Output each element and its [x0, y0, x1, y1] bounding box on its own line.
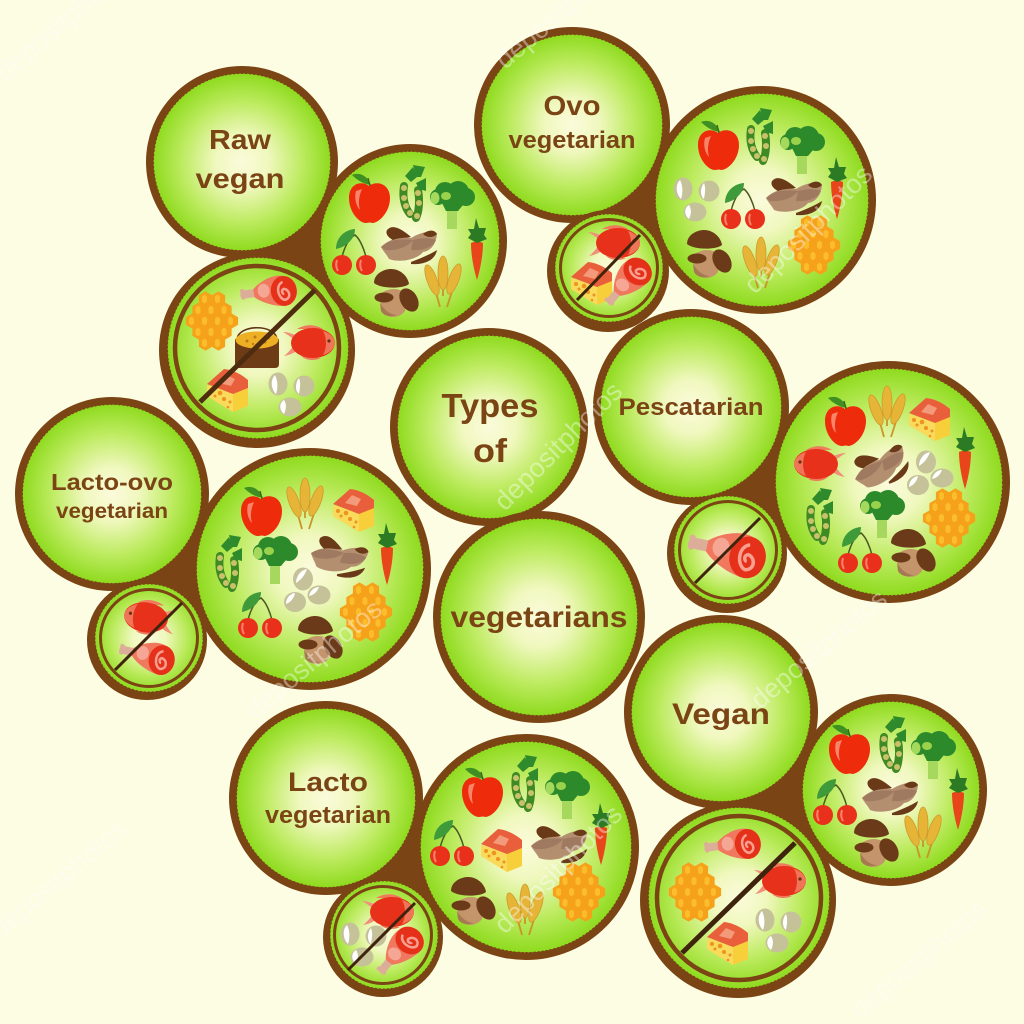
icon: cherry: [813, 779, 857, 825]
watermarks: depositphotos: [845, 894, 993, 1024]
icon: wheat: [504, 884, 546, 935]
watermarks: depositphotos: [240, 594, 388, 725]
icon: nuts: [531, 826, 587, 863]
icon: broccoli: [253, 536, 298, 584]
watermarks: depositphotos: [488, 376, 628, 516]
heading: types of: Types: [442, 387, 538, 424]
watermarks: depositphotos: [745, 584, 893, 715]
heading: vegetarians: vegetarians: [450, 601, 628, 634]
icon: nuts: [766, 178, 822, 215]
icon: fish: [283, 325, 335, 360]
icon: eggs: [268, 372, 314, 416]
icon: fish: [754, 863, 806, 898]
icon: pot: [235, 328, 279, 368]
heading: lacto-ovo vegetarian: [51, 469, 173, 523]
heading: lacto-ovo vegetarian: vegetarian: [56, 500, 168, 523]
icon: broccoli: [430, 181, 475, 229]
watermarks: depositphotos: [488, 799, 628, 939]
icon: carrot: [956, 427, 975, 489]
icon: wheat: [866, 386, 908, 437]
icon: broccoli: [545, 771, 590, 819]
panel: types of: [390, 328, 588, 526]
icon: meat: [702, 826, 763, 865]
icon: carrot: [592, 803, 611, 865]
icon: cheese: [481, 829, 522, 872]
prohibition line: [348, 903, 415, 970]
icon: honeycomb: [553, 862, 605, 922]
icon: apple: [825, 397, 866, 446]
icon: carrot: [949, 768, 968, 830]
icon: carrot: [468, 218, 487, 280]
icon: honeycomb: [923, 488, 975, 548]
panel: vegan: [624, 615, 987, 998]
panel: raw vegan: [146, 66, 507, 448]
icon: apple: [462, 768, 503, 817]
icon: meat: [369, 920, 429, 984]
panel: lacto vegetarian: [229, 701, 639, 997]
icon: eggs: [907, 450, 954, 495]
icon: mushroom: [298, 616, 347, 664]
panel: vegetarians: [433, 511, 645, 723]
icon: apple: [698, 121, 739, 170]
icon: cherry: [721, 183, 765, 229]
icon: nuts: [848, 440, 914, 495]
prohibition line: [682, 843, 795, 953]
icon: meat: [238, 273, 299, 312]
icon: nuts: [862, 778, 918, 815]
icon: carrot: [828, 157, 847, 219]
icon: peas: [217, 535, 242, 589]
heading: vegan: Vegan: [672, 698, 770, 731]
icon: wheat: [284, 478, 326, 529]
heading: raw vegan: vegan: [196, 163, 284, 194]
heading: types of: of: [473, 432, 508, 469]
heading: types of: [442, 387, 538, 469]
icon: cheese: [207, 369, 248, 412]
icon: meat: [597, 251, 657, 315]
icon: nuts: [381, 227, 437, 264]
icon: eggs: [756, 908, 802, 952]
prohibition line: [577, 235, 640, 300]
icon: mushroom: [891, 529, 940, 577]
icon: honeycomb: [186, 291, 238, 351]
icon: wheat: [740, 237, 782, 288]
heading: ovo vegetarian: [508, 90, 636, 154]
icon: wheat: [902, 807, 944, 858]
icon: fish: [794, 446, 846, 481]
prohibition line: [115, 603, 182, 670]
icon: peas: [401, 165, 426, 219]
panel: ovo vegetarian: [474, 27, 876, 332]
icon: meat: [683, 523, 770, 582]
panel: lacto-ovo vegetarian: [15, 397, 431, 700]
heading: raw vegan: Raw: [209, 124, 271, 155]
heading: lacto-ovo vegetarian: Lacto-ovo: [51, 469, 173, 495]
heading: ovo vegetarian: vegetarian: [508, 127, 636, 154]
icon: cheese: [707, 922, 748, 965]
icon: cheese: [909, 398, 950, 441]
icon: honeycomb: [340, 582, 392, 642]
icon: carrot: [378, 523, 397, 585]
icon: honeycomb: [669, 862, 721, 922]
icon: peas: [513, 755, 538, 809]
heading: pescatarian: Pescatarian: [618, 394, 764, 421]
heading: lacto vegetarian: vegetarian: [265, 802, 391, 829]
icon: cheese: [333, 489, 374, 532]
icon: wheat: [422, 256, 464, 307]
icon: broccoli: [860, 490, 905, 538]
heading: lacto vegetarian: [265, 767, 391, 829]
icon: cheese: [571, 262, 612, 305]
icon: mushroom: [854, 819, 903, 867]
prohibition line: [695, 518, 760, 583]
icon: peas: [748, 108, 773, 162]
icon: mushroom: [374, 269, 423, 317]
icon: apple: [241, 487, 282, 536]
heading: lacto vegetarian: Lacto: [288, 767, 368, 797]
icon: cherry: [238, 592, 282, 638]
icon: apple: [349, 174, 390, 223]
icon: broccoli: [780, 126, 825, 174]
icon: peas: [808, 488, 833, 542]
icon: eggs: [284, 568, 330, 612]
icon: mushroom: [451, 877, 500, 925]
icon: cherry: [838, 527, 882, 573]
prohibition line: [200, 290, 315, 402]
icon: meat: [116, 635, 178, 677]
icon: eggs: [340, 922, 386, 966]
icon: peas: [881, 716, 906, 770]
heading: raw vegan: [196, 124, 284, 194]
watermarks: depositphotos: [738, 159, 878, 299]
icon: fish: [588, 225, 640, 260]
icon: mushroom: [687, 230, 736, 278]
icon: eggs: [674, 178, 720, 222]
icon: nuts: [307, 534, 370, 582]
icon: fish: [122, 597, 178, 638]
icon: cherry: [332, 229, 376, 275]
icon: fish: [362, 894, 414, 929]
panel: pescatarian: [593, 309, 1010, 613]
icon: apple: [829, 725, 870, 774]
icon: cherry: [430, 820, 474, 866]
icon: broccoli: [911, 731, 956, 779]
heading: ovo vegetarian: Ovo: [544, 90, 600, 121]
icon: honeycomb: [788, 215, 840, 275]
